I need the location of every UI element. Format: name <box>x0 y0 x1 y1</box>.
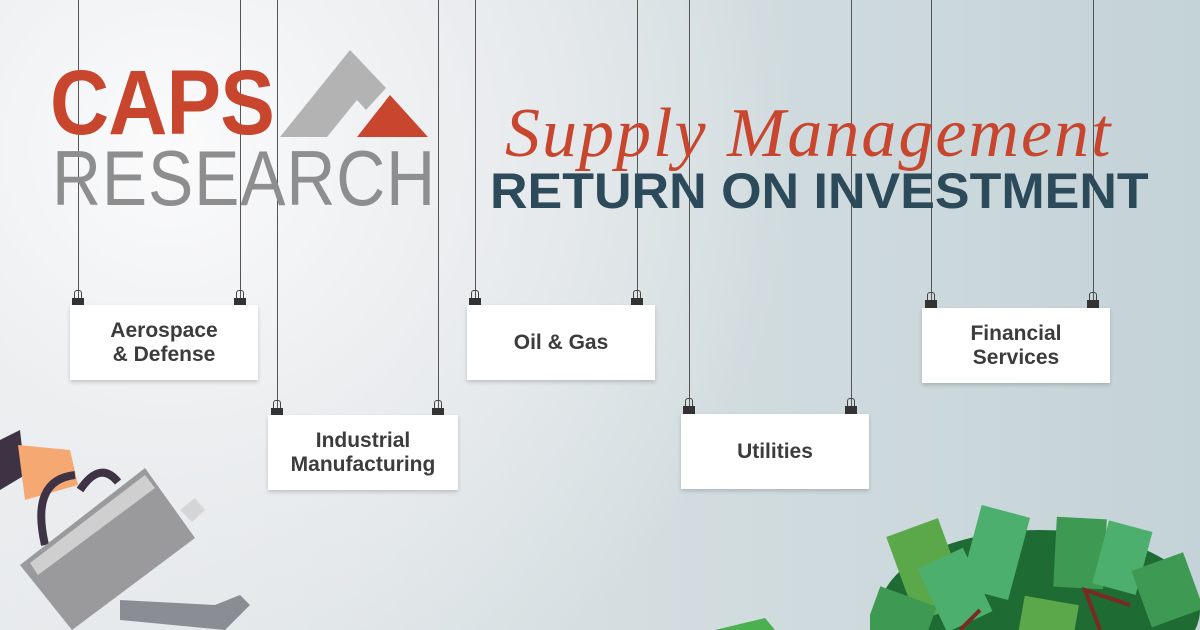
card: Industrial Manufacturing: Industrial <box>316 428 410 452</box>
strings and clips <box>72 0 1099 415</box>
card: Oil & Gas <box>467 305 655 380</box>
card: Financial Services <box>922 308 1110 383</box>
title main: RETURN ON INVESTMENT <box>490 163 1149 219</box>
card: Industrial Manufacturing <box>268 415 458 490</box>
title script: Supply Management <box>505 95 1112 172</box>
card: Financial Services: Services <box>973 346 1059 368</box>
logo CAPS: CAPS <box>50 52 274 154</box>
card: Utilities: Utilities <box>737 440 813 462</box>
card: Aerospace & Defense: & Defense <box>113 342 215 366</box>
card: Aerospace & Defense <box>70 305 258 380</box>
card: Aerospace & Defense: Aerospace <box>110 318 218 342</box>
logo mountain icon <box>280 50 428 137</box>
logo <box>50 50 436 222</box>
illustration: money tree <box>870 505 1200 630</box>
logo RESEARCH: RESEARCH <box>52 134 436 222</box>
card: Utilities <box>681 414 869 489</box>
card: Oil & Gas: Oil & Gas <box>514 330 608 354</box>
card: Industrial Manufacturing: Manufacturing <box>291 452 435 476</box>
illustration: hand with watering can <box>0 430 250 630</box>
card: Financial Services: Financial <box>970 322 1062 344</box>
